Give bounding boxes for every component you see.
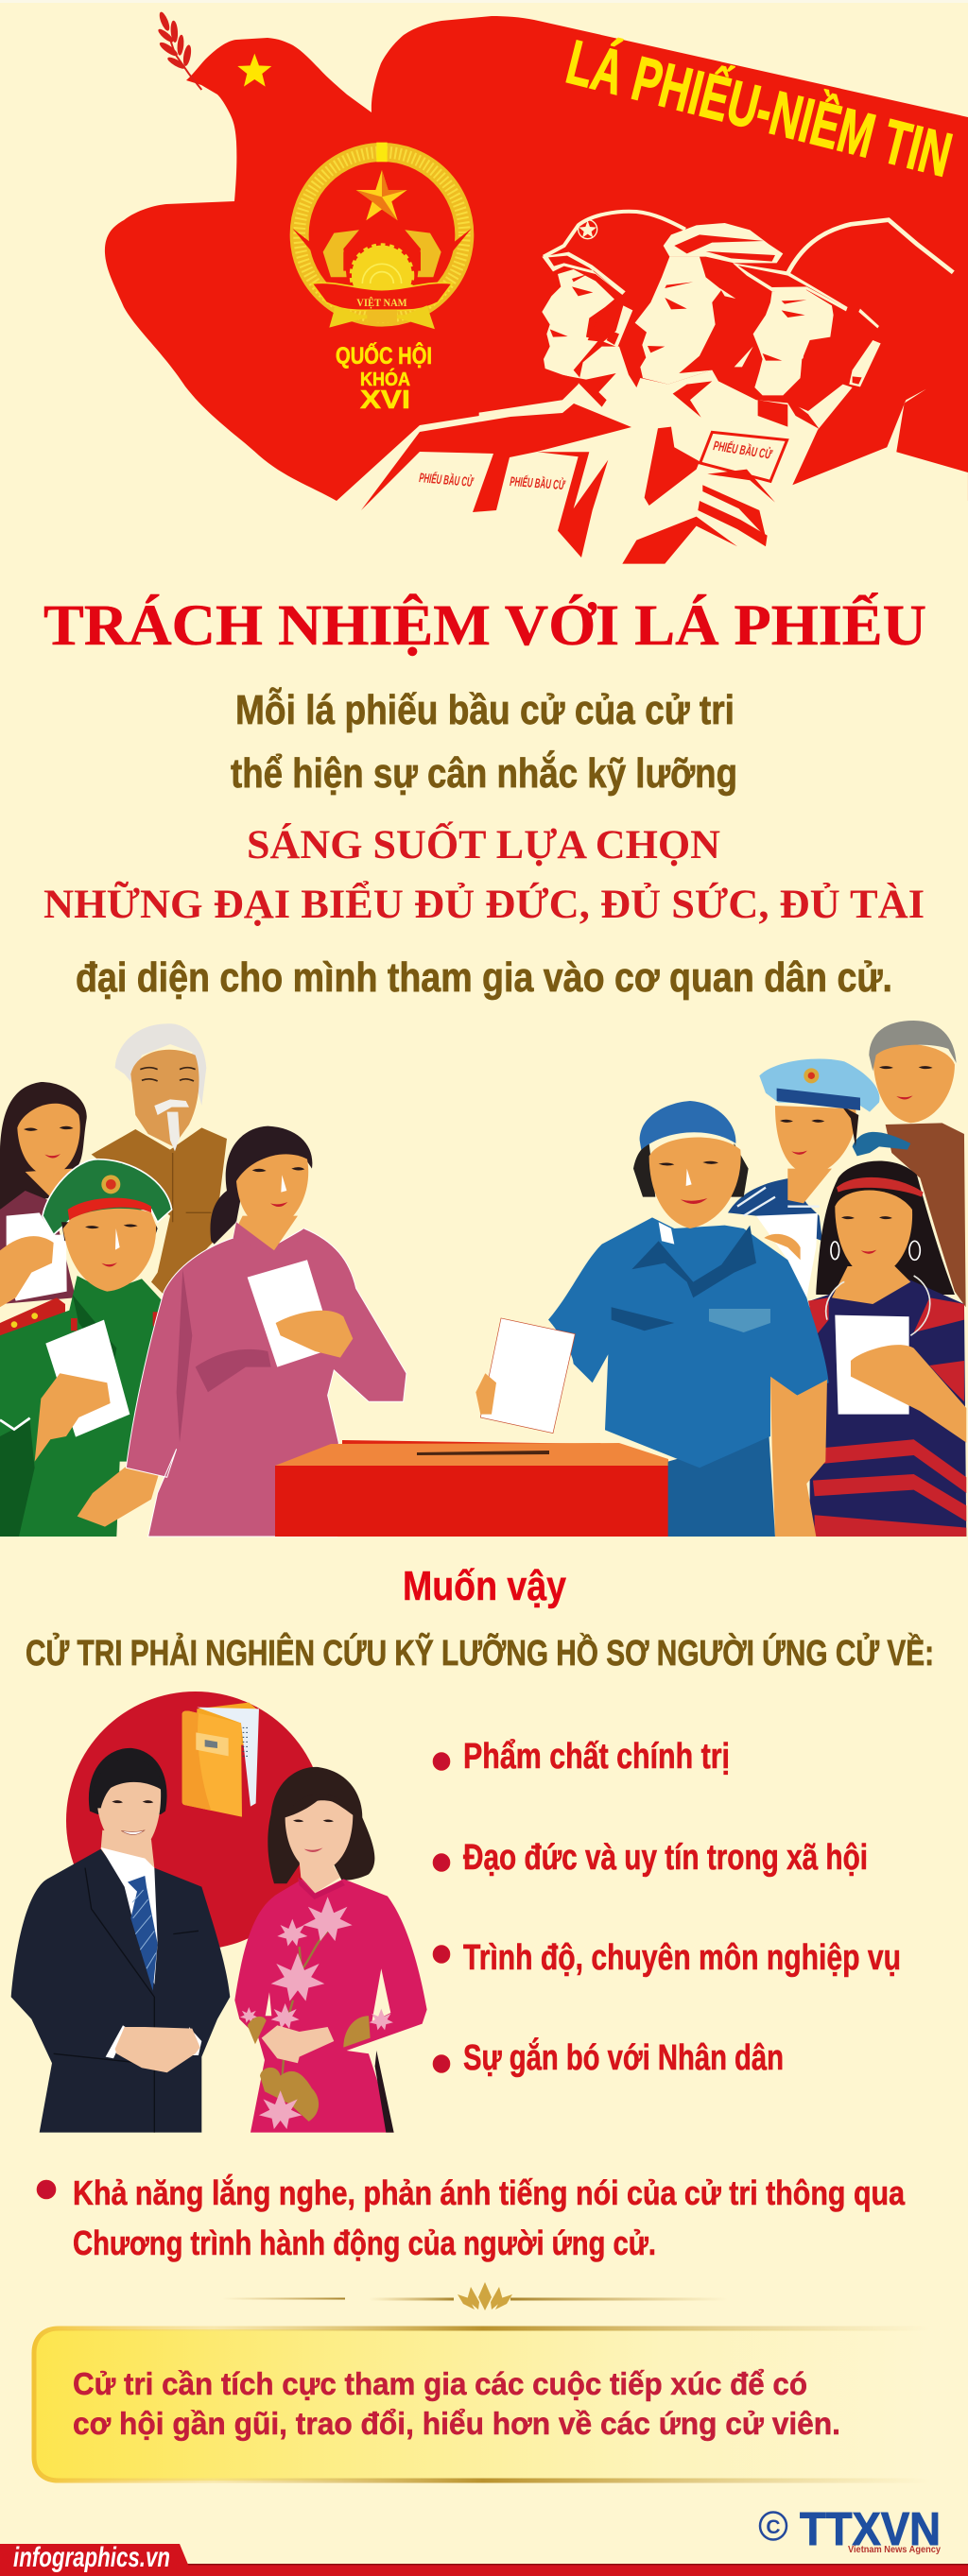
ballot labels: PHIẾU BẦU CỬ: [419, 469, 475, 489]
assembly label: KHÓA: [360, 368, 410, 390]
ornament divider: [222, 2282, 728, 2310]
soldier: [0, 1159, 205, 1537]
bullet 5: Chương trình hành động của người ứng cử.: [73, 2224, 656, 2262]
red emphasis text: NHỮNG ĐẠI BIỂU ĐỦ ĐỨC, ĐỦ SỨC, ĐỦ TÀI: [43, 881, 925, 927]
bullet 5: [37, 2172, 906, 2262]
bullet 4: Sự gắn bó với Nhân dân: [463, 2036, 784, 2078]
illustration: candidates with dossier: [11, 1692, 427, 2133]
three voters figures: [479, 212, 968, 567]
national emblem: [292, 143, 472, 329]
assembly label: XVI: [360, 385, 410, 414]
red dove and flag: [105, 16, 968, 501]
assembly label: QUỐC HỘI: [336, 341, 432, 369]
icon: folder: [182, 1703, 259, 1817]
intro text: [231, 686, 737, 797]
ballot labels: [419, 437, 774, 492]
woman far left: [0, 1082, 87, 1340]
ballot labels: PHIẾU BẦU CỬ: [713, 437, 774, 462]
red shoulder band: [361, 404, 631, 512]
ballot box: [275, 1440, 668, 1537]
ballot labels: PHIẾU BẦU CỬ: [510, 472, 566, 492]
woman in pink ao dai: [126, 1126, 406, 1537]
man in suit: [11, 1748, 230, 2133]
sailor: [728, 1058, 879, 1297]
bullet 1: Phẩm chất chính trị: [463, 1737, 730, 1777]
illustration: voters at ballot box: [0, 1021, 966, 1537]
TTXVN logo: C: [766, 2516, 781, 2538]
red emphasis text: SÁNG SUỐT LỰA CHỌN: [247, 822, 720, 867]
intro text: Mỗi lá phiếu bầu cử của cử tri: [235, 686, 735, 733]
old man: [92, 1023, 227, 1295]
header banner: [105, 10, 968, 567]
red emphasis text: [43, 822, 925, 927]
assembly label: [336, 341, 432, 414]
callout box: [34, 2328, 931, 2481]
left group of voters: [0, 1023, 406, 1537]
woman in ethnic dress: [808, 1161, 966, 1537]
older woman: [853, 1021, 966, 1307]
intro text: thể hiện sự cân nhắc kỹ lưỡng: [231, 749, 737, 797]
icon: olive branch and star: [157, 10, 271, 90]
callout text: [73, 2366, 840, 2441]
worker in blue: [475, 1101, 829, 1537]
bullet 4: [433, 2036, 784, 2078]
red circle: [66, 1692, 324, 1949]
woman in ao dai: [234, 1767, 427, 2133]
callout text: cơ hội gần gũi, trao đổi, hiểu hơn về các ứng cử viên.: [73, 2406, 840, 2441]
section heading: Muốn vậy: [403, 1563, 566, 1609]
callout text: Cử tri cần tích cực tham gia các cuộc tiếp xúc để có: [73, 2366, 807, 2401]
TTXVN logo: Vietnam News Agency: [848, 2545, 941, 2555]
main title: TRÁCH NHIỆM VỚI LÁ PHIẾU: [43, 592, 926, 658]
bullet 2: Đạo đức và uy tín trong xã hội: [463, 1838, 868, 1878]
site name: infographics.vn: [13, 2542, 170, 2573]
national emblem: VIỆT NAM: [356, 297, 407, 309]
footer bar: [0, 2542, 968, 2576]
right group of voters: [475, 1021, 966, 1537]
criteria list: [37, 1737, 906, 2262]
TTXVN logo: TTXVN: [800, 2504, 941, 2555]
